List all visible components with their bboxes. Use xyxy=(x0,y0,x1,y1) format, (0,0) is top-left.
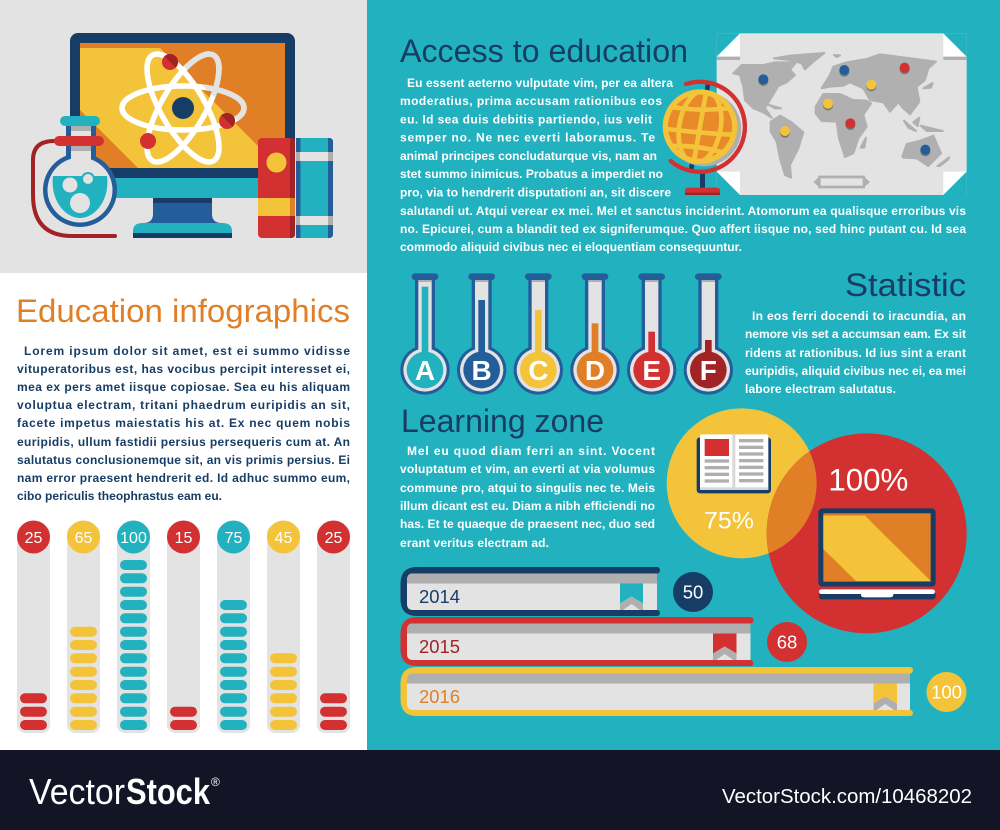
text block: lorem ipsum: euripidis, ullum fastidii persius persequeris cum at. An xyxy=(17,435,350,449)
heading: learning zone: Learning zone xyxy=(401,403,604,439)
badge: 50 xyxy=(673,572,713,612)
text block: access to education: stet summo inimicus. Probatus a imperdiet no xyxy=(400,167,663,181)
bar: 100: 100 xyxy=(120,530,147,547)
icon: open book xyxy=(697,434,771,493)
heading: statistic: Statistic xyxy=(845,267,966,303)
icon: stacked books xyxy=(258,138,333,238)
flask F: F xyxy=(700,355,717,386)
text block: learning zone: Mel eu quod diam ferri an sint. Vocent xyxy=(407,444,655,458)
text block: learning zone: voluptatum et vim, an everti at via volumus xyxy=(400,462,655,476)
icon: computer monitor xyxy=(70,33,295,238)
year: 2015: 2015 xyxy=(419,636,460,657)
flask E xyxy=(627,273,676,395)
bar: 100 xyxy=(117,520,150,733)
panel: teal content background xyxy=(367,0,1000,750)
flask C: C xyxy=(528,355,548,386)
text block: access to education: animal principes concludaturque vis, nam an xyxy=(400,149,657,163)
year: 2016: 2016 xyxy=(419,686,460,707)
text block: learning zone: has. Et te quaeque de praesent nec, duo sed xyxy=(400,517,655,531)
bar: 25: 25 xyxy=(25,530,42,547)
footer: watermark bar xyxy=(0,750,1000,830)
text block: learning zone: illum dicant est eu. Diam a nibh efficiendi no xyxy=(400,499,655,513)
text block: access to education: semper no. Ne nec everti laboramus. Te xyxy=(400,130,655,144)
text block: access to education: Eu essent aeterno vulputate vim, per ea altera xyxy=(407,76,673,90)
flask B xyxy=(457,273,506,395)
bar: 65 xyxy=(67,520,100,733)
panel: education infographics xyxy=(0,273,367,750)
circle: 100% xyxy=(767,433,967,633)
text block: lorem ipsum: nam error praesent hendrerit ed. Id adhuc summo eum, xyxy=(17,471,350,485)
text block: lorem ipsum: salutatus conclusionemque sit, an vis primis persius. Ei xyxy=(17,453,350,467)
bar: 25 xyxy=(317,520,350,733)
badge: 68 xyxy=(767,622,807,662)
year: 2014: 2014 xyxy=(419,586,460,607)
text block: lorem ipsum: vituperatoribus est, has vocibus percipit interesset ei, xyxy=(17,362,350,376)
text block: lorem ipsum: voluptua electram, tritani phaedrum euripidis an sit, xyxy=(17,398,350,412)
chart: venn diagram xyxy=(667,408,967,633)
heading: access to education: Access to education xyxy=(400,33,688,69)
chart: pill bars xyxy=(17,520,350,733)
icon: laptop xyxy=(818,508,936,599)
text block: lorem ipsum: Lorem ipsum dolor sit amet, est ei summo vidisse xyxy=(24,344,350,358)
bar: 15 xyxy=(167,520,200,733)
badge: 100: 100 xyxy=(931,682,962,702)
map legend plate xyxy=(813,176,870,188)
book bar: 2015 xyxy=(400,617,754,666)
text block: lorem ipsum: cibo periculis theophrastus eam eu. xyxy=(17,489,222,503)
bar: 65: 65 xyxy=(75,530,92,547)
chart: test tube flasks xyxy=(400,273,733,395)
icon: globe xyxy=(662,82,745,195)
book bar: 2014 xyxy=(400,567,660,616)
text block: statistic xyxy=(745,309,966,396)
text block: lorem ipsum xyxy=(17,344,350,503)
text block: statistic: ridens at rationibus. Id ius sint a erant xyxy=(745,346,966,360)
label: 100%: 100% xyxy=(828,463,908,498)
bar: 25: 25 xyxy=(325,530,342,547)
flask C xyxy=(514,273,563,395)
badge: 100 xyxy=(926,672,966,712)
text block: access to education: moderatius, prima accusam rationibus eos xyxy=(400,94,662,108)
text block: statistic: In eos ferri docendi to iracundia, an xyxy=(752,309,966,323)
text block: statistic: euripidis, aliquid civibus nec ei, ea mei xyxy=(745,364,966,378)
book bar: 2016 xyxy=(400,667,913,716)
text block: lorem ipsum: mea ex pers amet iisque copiosae. Sea eu his aliquam xyxy=(17,380,350,394)
badge: 50: 50 xyxy=(683,582,703,602)
bar: 45 xyxy=(267,520,300,733)
flask D: D xyxy=(585,355,605,386)
text block: access to education: no. Epicurei, cum a blandit ted ex signiferumque. Quo affert iisque no, sed hinc putant cu. Id sea xyxy=(400,222,966,236)
bar: 45: 45 xyxy=(275,530,292,547)
badge: 68: 68 xyxy=(777,632,797,652)
logo: VectorStock xyxy=(29,771,220,812)
text block: access to education: pro, via to hendrerit disputationi an, sit discere xyxy=(400,186,671,200)
flask A: A xyxy=(415,355,435,386)
overlap xyxy=(766,452,817,554)
illustration: world map with pins xyxy=(717,33,967,195)
icon: atom xyxy=(122,44,244,172)
icon: chemistry flask xyxy=(33,116,117,236)
flask A xyxy=(400,273,450,395)
text block: access to education: eu. Id sea duis debitis partiendo, ius velit xyxy=(400,112,652,126)
circle: 75% xyxy=(667,408,817,558)
text block: access to education: salutandi ut. Atqui verear ex mei. Mel et sanctus inciderint. Atomorum ea qualisque erroribus vis xyxy=(400,204,966,218)
flask E: E xyxy=(642,355,661,386)
text block: learning zone xyxy=(400,444,655,550)
text block: access to education xyxy=(400,76,966,254)
heading: education infographics: Education infographics xyxy=(16,293,350,329)
label: 75%: 75% xyxy=(704,507,754,534)
bar: 25 xyxy=(17,520,50,733)
logo: VectorStock: Vector xyxy=(29,771,125,812)
flask F xyxy=(684,273,733,395)
text block: learning zone: commune pro, atqui to singulis nec te. Meis xyxy=(400,481,655,495)
panel: hero illustration xyxy=(0,0,367,273)
text block: access to education: commodo aliquid civibus nec ei eloquentiam consequuntur. xyxy=(400,240,742,254)
bar: 15: 15 xyxy=(175,530,192,547)
logo: VectorStock: Stock xyxy=(126,771,211,812)
text block: lorem ipsum: facete impetus maiestatis his at. Ex nec quem nobis xyxy=(17,416,350,430)
logo: VectorStock: ® xyxy=(211,775,220,789)
bar: 75 xyxy=(217,520,250,733)
text block: statistic: labore electram salutatus. xyxy=(745,382,896,396)
bar: 75: 75 xyxy=(225,530,242,547)
image id: VectorStock.com/10468202 xyxy=(722,785,972,808)
text block: learning zone: erant veritus electram ad. xyxy=(400,536,549,550)
flask B: B xyxy=(472,355,492,386)
flask D xyxy=(570,273,620,395)
text block: statistic: nemore vis set a accumsan eam. Ex sit xyxy=(745,327,966,341)
